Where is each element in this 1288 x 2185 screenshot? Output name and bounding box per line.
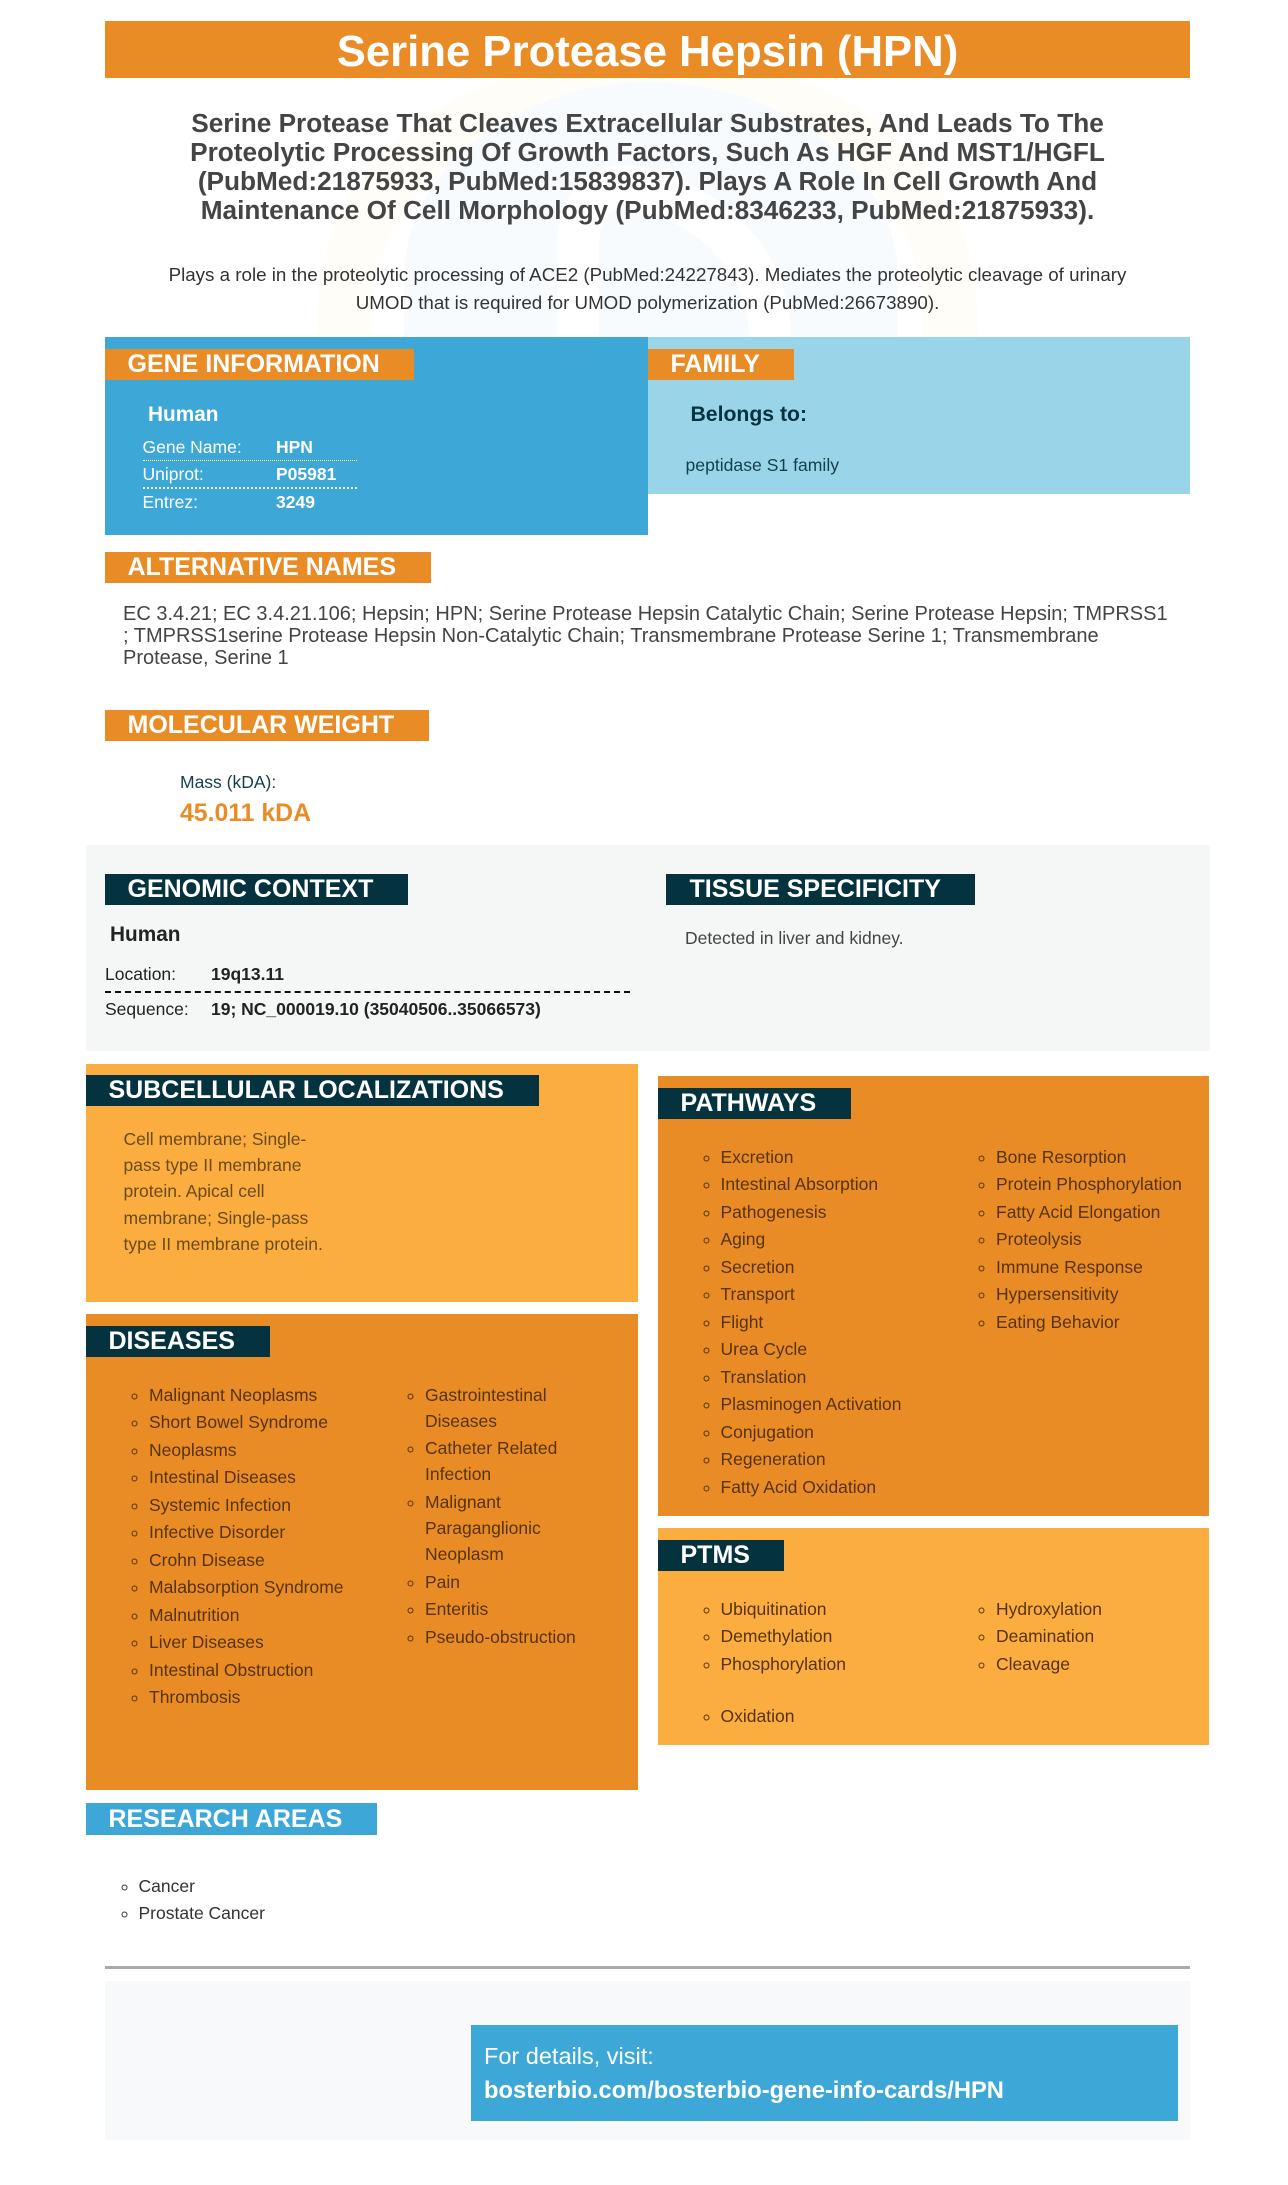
diseases list column 1: Intestinal Obstruction <box>149 1660 313 1680</box>
PTMs list column 2: Cleavage <box>996 1654 1070 1674</box>
heading: diseases <box>86 1326 270 1357</box>
diseases list column 1: Malnutrition <box>149 1604 239 1624</box>
heading: pathways <box>658 1088 851 1119</box>
summary heading: Proteolytic Processing Of Growth Factors, Such As HGF And MST1/HGFL <box>190 137 1105 167</box>
heading: subcellular localizations: SUBCELLULAR LOCALIZATIONS <box>108 1076 504 1104</box>
divider <box>105 1966 1190 1969</box>
location row: Location: <box>105 964 176 984</box>
gene table: Entrez: <box>142 492 198 512</box>
pathways list column 1 <box>704 1146 901 1496</box>
pathways list column 1: Excretion <box>720 1146 793 1166</box>
localization text: membrane; Single-pass <box>124 1208 308 1228</box>
mass label: Mass (kDA): <box>180 772 276 792</box>
localization text: protein. Apical cell <box>124 1181 265 1201</box>
localization text: Cell membrane; Single- <box>124 1129 306 1149</box>
summary heading: (PubMed:21875933, PubMed:15839837). Plays A Role In Cell Growth And <box>198 166 1097 196</box>
panel: family <box>648 337 1190 494</box>
diseases list column 2: Pain <box>425 1572 460 1592</box>
panel: gene information <box>105 337 648 535</box>
tissue text: Detected in liver and kidney. <box>685 928 904 948</box>
callout lead text: For details, visit: <box>484 2043 654 2069</box>
diseases list column 1: Malabsorption Syndrome <box>149 1577 344 1597</box>
PTMs list column 1: Demethylation <box>720 1626 832 1646</box>
pathways list column 1: Flight <box>720 1312 763 1332</box>
panel: diseases <box>86 1314 638 1790</box>
pathways list column 2 <box>978 1146 1182 1332</box>
pathways list column 1: Pathogenesis <box>720 1202 827 1222</box>
watermark logo <box>300 78 1010 338</box>
location row: 19q13.11 <box>211 964 284 984</box>
localization text <box>124 1129 323 1254</box>
diseases list column 1: Short Bowel Syndrome <box>149 1412 328 1432</box>
title: Serine Protease Hepsin (HPN) <box>337 27 958 76</box>
heading: genomic context: GENOMIC CONTEXT <box>128 875 373 903</box>
pathways list column 2: Hypersensitivity <box>996 1284 1119 1304</box>
summary heading <box>190 108 1105 225</box>
heading: gene information: GENE INFORMATION <box>128 350 380 378</box>
belongs to: Belongs to: <box>690 403 807 426</box>
PTMs list column 1 <box>704 1598 846 1726</box>
diseases list column 1: Infective Disorder <box>149 1522 285 1542</box>
pathways list column 2: Fatty Acid Elongation <box>996 1202 1160 1222</box>
panel: PTMs <box>658 1528 1209 1745</box>
PTMs list column 2: Deamination <box>996 1626 1094 1646</box>
pathways list column 1: Aging <box>720 1229 765 1249</box>
heading: PTMs: PTMS <box>680 1541 750 1569</box>
diseases list column 2: Pseudo-obstruction <box>425 1627 576 1647</box>
pathways list column 1: Regeneration <box>720 1449 826 1469</box>
diseases list column 2: Enteritis <box>425 1599 488 1619</box>
heading: tissue specificity: TISSUE SPECIFICITY <box>690 875 941 903</box>
heading: diseases: DISEASES <box>108 1327 235 1355</box>
summary heading: Serine Protease That Cleaves Extracellular Substrates, And Leads To The <box>191 108 1104 138</box>
heading: family <box>648 349 794 380</box>
pathways list column 2: Bone Resorption <box>996 1146 1126 1166</box>
pathways list column 1: Secretion <box>720 1256 794 1276</box>
heading: family: FAMILY <box>670 350 760 378</box>
panel: subcellular localizations <box>86 1064 638 1302</box>
gene table: 3249 <box>276 492 315 512</box>
alternative names text: Protease, Serine 1 <box>123 647 289 669</box>
summary heading: Maintenance Of Cell Morphology (PubMed:8346233, PubMed:21875933). <box>201 195 1094 225</box>
species: Human <box>110 923 180 946</box>
description: Plays a role in the proteolytic processing of ACE2 (PubMed:24227843). Mediates the proteolytic cleavage of urinary <box>169 264 1126 285</box>
species: Human <box>148 403 218 426</box>
diseases list column 1 <box>132 1384 344 1707</box>
PTMs list column 1: Ubiquitination <box>720 1598 827 1618</box>
research areas list: Cancer <box>138 1876 195 1896</box>
diseases list column 1: Crohn Disease <box>149 1550 265 1570</box>
research areas list: Prostate Cancer <box>138 1903 265 1923</box>
alternative names text <box>123 603 1168 669</box>
PTMs list column 1: Phosphorylation <box>720 1654 846 1674</box>
PTMs list column 1: Oxidation <box>720 1706 794 1726</box>
panel: pathways <box>658 1076 1209 1516</box>
panel: footer <box>105 1981 1190 2140</box>
description: UMOD that is required for UMOD polymerization (PubMed:26673890). <box>356 292 939 313</box>
diseases list column 1: Neoplasms <box>149 1440 237 1460</box>
pathways list column 1: Conjugation <box>720 1422 814 1442</box>
diseases list column 1: Intestinal Diseases <box>149 1467 296 1487</box>
heading: alternative names: ALTERNATIVE NAMES <box>128 553 396 581</box>
localization text: type II membrane protein. <box>124 1234 323 1254</box>
pathways list column 2: Eating Behavior <box>996 1312 1120 1332</box>
diseases list column 2: Catheter Related Infection <box>425 1438 557 1484</box>
sequence row: Sequence: <box>105 999 189 1019</box>
gene table <box>142 437 357 512</box>
diseases list column 1: Thrombosis <box>149 1687 240 1707</box>
pathways list column 2: Proteolysis <box>996 1229 1082 1249</box>
pathways list column 1: Urea Cycle <box>720 1339 807 1359</box>
diseases list column 2: Malignant Paraganglionic Neoplasm <box>425 1492 541 1564</box>
pathways list column 1: Plasminogen Activation <box>720 1394 901 1414</box>
pathways list column 2: Immune Response <box>996 1256 1143 1276</box>
heading: pathways: PATHWAYS <box>680 1089 816 1117</box>
alternative names text: EC 3.4.21; EC 3.4.21.106; Hepsin; HPN; Serine Protease Hepsin Catalytic Chain; Serine Protease Hepsin; TMPRSS1 <box>123 603 1168 625</box>
heading: PTMs <box>658 1540 784 1571</box>
pathways list column 1: Translation <box>720 1366 806 1386</box>
pathways list column 2: Protein Phosphorylation <box>996 1174 1182 1194</box>
alternative names text: ; TMPRSS1serine Protease Hepsin Non-Catalytic Chain; Transmembrane Protease Serine 1; Transmembrane <box>123 625 1099 647</box>
panel: genomic context and tissue specificity <box>86 845 1210 1051</box>
diseases list column 1: Systemic Infection <box>149 1494 291 1514</box>
diseases list column 2: Gastrointestinal Diseases <box>425 1384 547 1431</box>
callout: details link <box>471 2025 1178 2121</box>
PTMs list column 2: Hydroxylation <box>996 1598 1102 1618</box>
heading: molecular weight: MOLECULAR WEIGHT <box>128 711 394 739</box>
description <box>169 264 1126 313</box>
diseases list column 2 <box>408 1384 576 1647</box>
gene table: P05981 <box>276 464 336 484</box>
sequence row: 19; NC_000019.10 (35040506..35066573) <box>211 999 541 1019</box>
PTMs list column 2 <box>978 1598 1102 1674</box>
pathways list column 1: Transport <box>720 1284 795 1304</box>
title <box>105 21 1190 78</box>
pathways list column 1: Fatty Acid Oxidation <box>720 1476 876 1496</box>
localization text: pass type II membrane <box>124 1155 302 1175</box>
gene table: Uniprot: <box>142 464 204 484</box>
diseases list column 1: Malignant Neoplasms <box>149 1384 317 1404</box>
gene table: Gene Name: <box>142 437 242 457</box>
pathways list column 1: Intestinal Absorption <box>720 1174 878 1194</box>
callout url: bosterbio.com/bosterbio-gene-info-cards/HPN <box>484 2078 1004 2104</box>
family value: peptidase S1 family <box>686 454 839 474</box>
location row <box>105 963 630 993</box>
diseases list column 1: Liver Diseases <box>149 1632 264 1652</box>
research areas list <box>122 1876 265 1923</box>
gene table: HPN <box>276 437 313 457</box>
mass value: 45.011 kDA <box>180 800 311 827</box>
heading: research areas: RESEARCH AREAS <box>108 1805 342 1833</box>
